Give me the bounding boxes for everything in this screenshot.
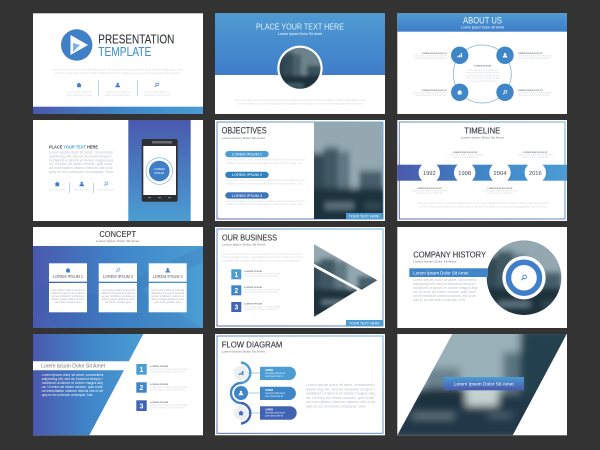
body text: adipiscing elit, sed do eiusmod tempor i bbox=[413, 282, 476, 286]
banner bbox=[443, 377, 524, 390]
slide: photo banner bbox=[397, 334, 567, 436]
icon: smartphone: LOREM bbox=[154, 167, 165, 171]
body text bbox=[49, 150, 114, 174]
item 3 bbox=[225, 192, 305, 206]
title bbox=[98, 32, 174, 59]
card 3: LOREM IPSUM 3 bbox=[153, 274, 183, 279]
label 2: Lorem ipsum dolor sit bbox=[265, 395, 283, 398]
side labels: Lorem ipsum dolor sit amet elit sed bbox=[413, 54, 447, 58]
label 3: LOREM bbox=[265, 410, 273, 412]
centre text: Lorem ipsum dolor sit amet elit sed bbox=[466, 71, 500, 75]
year markers: 2004 bbox=[494, 171, 507, 177]
centre text: Lorem ipsum dolor sit amet bbox=[468, 79, 497, 83]
body text: ua. Ut enim ad minim veniam, quis nostr bbox=[49, 162, 113, 166]
side labels: Lorem ipsum dolor sit amet elit sed bbox=[415, 93, 447, 97]
step 3: Lorem ipsum dolor sit amet elit bbox=[150, 406, 185, 410]
subtitle: Lorem Ipsum Dolor Sit Amet bbox=[222, 243, 265, 247]
circle photo bbox=[486, 240, 562, 315]
label 1: Lorem ipsum dolor sit bbox=[265, 375, 283, 378]
card 1: Lorem ipsum dolor sit amet elit bbox=[52, 288, 85, 292]
body text: ncididunt ut labore et dolore magna aliq bbox=[49, 158, 113, 162]
label 3: Lorem ipsum dolor sit bbox=[265, 414, 283, 417]
icon: smartphone: IPSUM bbox=[155, 171, 165, 175]
highlight bar bbox=[409, 268, 488, 277]
card 1: dolore magna aliqua ut enim bbox=[52, 297, 84, 301]
body text: Lorem ipsum dolor sit amet, consectetur bbox=[413, 278, 478, 282]
body text: ncididunt ut labore et dolore magna aliq bbox=[42, 381, 103, 385]
centre text bbox=[466, 66, 500, 83]
intro text bbox=[52, 68, 183, 75]
step 3: Lorem ipsum dolor sit amet elit sed bbox=[150, 403, 189, 407]
upper captions bbox=[448, 152, 553, 159]
card 2: ad minim veniam quis bbox=[105, 300, 132, 304]
body text: ncididunt ut labore et dolore magna aliq bbox=[413, 286, 477, 290]
slide: company history bbox=[397, 221, 568, 328]
lower captions: Lorem ipsum dolor sit bbox=[416, 191, 443, 195]
icon: smartphone bbox=[142, 139, 178, 202]
body text: ua. Ut enim ad minim veniam, quis nostr bbox=[413, 290, 477, 294]
step 1 bbox=[231, 269, 280, 279]
item 2: Lorem ipsum dolor sit amet, consectetur adipiscing elit, sed do eiusmod tempor bbox=[226, 178, 305, 182]
white heading bar: Lorem Ipsum Dolor Sit Amet bbox=[41, 364, 106, 370]
item 2: LOREM IPSUM 2 bbox=[232, 173, 262, 177]
title: FLOW DIAGRAM bbox=[222, 340, 283, 349]
body text: exercitation ullamco laboris nisi ut aliquip ex ea commodo consequat duis bbox=[222, 258, 300, 262]
body text: Lorem ipsum dolor sit amet, consectetur adipiscing elit, sed do eiusmod tempor incididunt ut labore et dolore magna aliqua ut enim bbox=[417, 201, 549, 205]
card 2: adipiscing elit sed do eiusmod bbox=[102, 291, 135, 295]
step 3: 3 bbox=[234, 305, 238, 312]
lower captions: Lorem ipsum dolor sit amet elit sed bbox=[412, 188, 447, 192]
slide: presentation template cover bbox=[33, 13, 203, 114]
slide: phone bbox=[33, 120, 203, 221]
body text: ad minim veniam, quis nostrud exercitation ullamco laboris nisi ut aliquip ex ea commodo consequat duis aute irure dolor bbox=[237, 102, 363, 106]
title: OBJECTIVES bbox=[222, 126, 267, 136]
label 2: Lorem ipsum dolor sit amet bbox=[265, 392, 285, 395]
step 1: 1 bbox=[140, 367, 144, 374]
white heading bar bbox=[33, 361, 130, 370]
photo label: YOUR TEXT HERE bbox=[349, 215, 380, 219]
icon row: Lorem ipsum dolor sit amet bbox=[66, 93, 92, 97]
item 1 bbox=[225, 151, 305, 165]
step 2 bbox=[136, 382, 189, 393]
side labels: LOREM IPSUM DOLOR SIT bbox=[518, 90, 543, 92]
lower captions: Lorem ipsum dolor sit amet elit sed bbox=[482, 188, 518, 192]
side labels: Lorem ipsum dolor sit amet elit sed bbox=[518, 54, 552, 58]
step 3: Lorem ipsum dolor sit amet elit sed bbox=[244, 304, 280, 308]
upper captions: Lorem ipsum dolor sit amet elit sed bbox=[448, 152, 483, 156]
subtitle: Lorem Ipsum Dolor Sit Amet bbox=[461, 136, 504, 140]
step 1: Lorem ipsum dolor sit amet elit bbox=[150, 370, 185, 374]
item 1: LOREM IPSUM 1 bbox=[232, 152, 262, 156]
frame bbox=[399, 122, 565, 219]
body text bbox=[42, 373, 105, 397]
icon: play logo bbox=[61, 29, 92, 61]
blue header bbox=[215, 13, 385, 75]
step 3: LOREM IPSUM bbox=[150, 402, 168, 404]
body text: adipiscing elit, sed do eiusmod tempor i bbox=[306, 387, 375, 391]
step 2: LOREM IPSUM bbox=[150, 384, 168, 386]
slide: about us bbox=[397, 13, 567, 114]
body text: Lorem ipsum dolor sit amet, consectetur adipiscing elit, sed do eiusmod tempor incididunt ut labore et dolore magna aliqua ut enim bbox=[234, 98, 366, 102]
intro text: ad minim veniam, quis nostrud exercitation ullamco laboris nisi ut aliquip ex ea commodo consequat duis aute irure dolor bbox=[55, 71, 180, 75]
step 2: 2 bbox=[140, 385, 144, 392]
step 1: 1 bbox=[234, 272, 238, 279]
card 2: LOREM IPSUM 2 bbox=[103, 274, 134, 279]
step 1: Lorem ipsum dolor sit amet elit bbox=[244, 274, 277, 278]
body text: ua. Ut enim ad minim veniam, quis nostr bbox=[42, 385, 104, 389]
step 2: 2 bbox=[234, 288, 238, 295]
icon row: Lorem ipsum dolor sit bbox=[67, 90, 91, 94]
step 1: LOREM IPSUM bbox=[244, 271, 262, 273]
triangle photo bbox=[314, 244, 378, 317]
slide: our business bbox=[215, 227, 388, 328]
card 3: tempor incididunt ut labore et bbox=[151, 294, 184, 298]
step 3 bbox=[136, 400, 189, 411]
heading: PLACE YOUR TEXT HERE bbox=[49, 145, 98, 150]
side labels: LOREM IPSUM DOLOR SIT bbox=[518, 53, 543, 55]
card 3: Lorem ipsum dolor sit amet elit bbox=[151, 288, 184, 292]
slide: diagonal blue bbox=[33, 334, 203, 435]
photo label bbox=[346, 320, 383, 326]
body text: ud exercitation ullamco laboris nisi ut ali bbox=[413, 294, 476, 298]
bottom gradient bar bbox=[33, 107, 203, 114]
label 3: Lorem ipsum dolor sit amet bbox=[265, 412, 285, 415]
title: CONCEPT bbox=[99, 230, 136, 239]
blue panel bbox=[128, 120, 191, 221]
side labels: Lorem ipsum dolor sit amet elit sed bbox=[413, 90, 447, 94]
item 2: incididunt ut labore et dolore magna aliqua ut enim ad minim veniam, quis bbox=[226, 182, 302, 186]
subtitle: Lorem Ipsum Dolor Sit Amet bbox=[96, 239, 139, 243]
body text: ua. Ut enim ad minim veniam, quis nostr bbox=[306, 396, 376, 400]
year markers bbox=[419, 162, 546, 183]
body text: quip ex ea commodo consequat. Duis bbox=[42, 393, 93, 397]
step 3: LOREM IPSUM bbox=[244, 304, 262, 306]
label 3 bbox=[260, 406, 297, 420]
icon row: Lorem ipsum dolor bbox=[74, 188, 90, 192]
item 1: incididunt ut labore et dolore magna aliqua ut enim ad minim veniam, quis bbox=[226, 161, 302, 165]
body text: ud exercitation ullamco laboris nisi ut ali bbox=[42, 389, 103, 393]
body text: ad minim veniam, quis nostrud exercitation ullamco laboris nisi ut aliquip ex ea commodo consequat duis aute irure dolor bbox=[419, 204, 547, 208]
side labels: LOREM IPSUM DOLOR SIT bbox=[422, 53, 447, 55]
icon row: Lorem ipsum dolor sit amet bbox=[144, 93, 170, 97]
year markers: 1992 bbox=[423, 171, 436, 177]
title: PLACE YOUR TEXT HERE bbox=[256, 21, 344, 31]
body text: Lorem ipsum dolor sit amet, consectetur bbox=[42, 373, 105, 377]
step 3: Lorem ipsum dolor sit amet elit bbox=[244, 307, 277, 311]
body text: ud exercitation ullamco laboris nisi ut ali bbox=[306, 400, 375, 404]
slide: timeline bbox=[397, 120, 567, 221]
gradient panel bbox=[33, 246, 203, 328]
icon row: Lorem ipsum dolor sit amet bbox=[105, 93, 131, 97]
year markers: 1998 bbox=[458, 171, 471, 177]
title: OUR BUSINESS bbox=[222, 232, 277, 242]
body text: incididunt ut labore et dolore magna aliqua ut enim ad minim veniam, quis nostrud bbox=[222, 255, 303, 259]
card 2 bbox=[99, 263, 137, 312]
lower captions: LOREM IPSUM DOLOR SIT bbox=[417, 188, 442, 190]
card 3: adipiscing elit sed do eiusmod bbox=[151, 291, 185, 295]
ring diagram bbox=[451, 45, 514, 103]
step 3 bbox=[231, 302, 280, 312]
subtitle: Lorem Ipsum Dolor Sit Amet bbox=[222, 349, 265, 353]
side labels: Lorem ipsum dolor sit amet elit sed bbox=[518, 93, 550, 97]
label 1: Lorem ipsum dolor sit amet bbox=[265, 372, 285, 375]
icon row bbox=[66, 80, 170, 97]
band bbox=[397, 165, 567, 181]
title: COMPANY HISTORY bbox=[413, 251, 487, 260]
lower captions: Lorem ipsum dolor sit bbox=[487, 191, 513, 195]
body text: quip ex ea commodo consequat. Duis bbox=[49, 170, 113, 174]
card 1: adipiscing elit sed do eiusmod bbox=[52, 291, 85, 295]
target badge bbox=[502, 256, 546, 299]
step 2: LOREM IPSUM bbox=[244, 287, 262, 289]
blue header bbox=[397, 13, 567, 32]
card 2: tempor incididunt ut labore et bbox=[102, 294, 135, 298]
step 2 bbox=[231, 285, 280, 295]
slide: concept bbox=[33, 227, 203, 328]
card 3: ad minim veniam quis bbox=[155, 300, 181, 304]
step 1: Lorem ipsum dolor sit amet elit sed bbox=[150, 367, 189, 371]
slide: objectives bbox=[215, 120, 385, 221]
subtitle: Lorem Ipsum Dolor Sit Amet bbox=[461, 26, 504, 30]
item 2 bbox=[225, 172, 305, 186]
photo label: YOUR TEXT HERE bbox=[349, 322, 380, 326]
item 3: Lorem ipsum dolor sit amet, consectetur adipiscing elit, sed do eiusmod tempor bbox=[226, 199, 305, 203]
subtitle: Lorem Ipsum Dolor Sit Amet bbox=[222, 136, 265, 140]
diagonal gradient panel bbox=[33, 334, 143, 435]
step 2: Lorem ipsum dolor sit amet elit bbox=[150, 388, 185, 392]
step 3: 3 bbox=[140, 403, 144, 410]
body text bbox=[417, 201, 549, 208]
body text bbox=[234, 98, 366, 106]
circle photo bbox=[277, 46, 323, 89]
step 1 bbox=[136, 364, 189, 375]
icon row: Lorem ipsum dolor bbox=[98, 188, 114, 192]
title: TIMELINE bbox=[464, 126, 500, 135]
item 3: LOREM IPSUM 3 bbox=[232, 194, 262, 198]
frame bbox=[217, 122, 383, 219]
body text bbox=[306, 383, 376, 408]
centre text: Lorem ipsum dolor sit amet elit bbox=[468, 68, 498, 72]
side labels bbox=[413, 53, 552, 97]
step 2: Lorem ipsum dolor sit amet elit sed bbox=[150, 385, 189, 389]
step 2: Lorem ipsum dolor sit amet elit sed bbox=[244, 288, 280, 292]
upper captions: Lorem ipsum dolor sit bbox=[522, 155, 548, 159]
side labels: LOREM IPSUM DOLOR SIT bbox=[422, 90, 447, 92]
card 1: tempor incididunt ut labore et bbox=[52, 294, 85, 298]
photo bbox=[314, 122, 383, 219]
frame bbox=[217, 336, 383, 433]
centre text: Lorem ipsum dolor sit amet elit sed bbox=[466, 73, 500, 77]
facets bbox=[33, 246, 203, 328]
body text: adipiscing elit, sed do eiusmod tempor i bbox=[42, 377, 103, 381]
title: PRESENTATION bbox=[98, 32, 174, 46]
label 1: LOREM bbox=[265, 370, 273, 372]
subtitle: Lorem Ipsum Dolor Sit Amet bbox=[278, 32, 322, 36]
frame bbox=[217, 229, 383, 326]
icon row: Lorem ipsum dolor sit bbox=[106, 90, 130, 94]
card 2: dolore magna aliqua ut enim bbox=[102, 297, 134, 301]
lower captions: LOREM IPSUM DOLOR SIT bbox=[488, 188, 513, 190]
highlight bar: Lorem Ipsum Dolor Sit Amet bbox=[413, 271, 469, 276]
label 2 bbox=[260, 387, 296, 400]
label 2: LOREM bbox=[265, 390, 273, 392]
parallelogram photo bbox=[398, 334, 567, 436]
photo label bbox=[346, 213, 383, 219]
lower captions bbox=[412, 188, 518, 195]
icon row: Lorem ipsum dolor sit bbox=[145, 90, 169, 94]
item 3: incididunt ut labore et dolore magna aliqua ut enim ad minim veniam, quis bbox=[226, 202, 302, 206]
upper captions: LOREM IPSUM DOLOR SIT bbox=[452, 152, 478, 154]
slide: place your text here bbox=[215, 13, 385, 114]
centre text: Lorem ipsum dolor sit amet elit sed bbox=[466, 76, 500, 80]
card 1: LOREM IPSUM 1 bbox=[53, 274, 84, 279]
body text bbox=[413, 278, 478, 302]
card 1 bbox=[49, 263, 87, 312]
body text: Lorem ipsum dolor sit amet, consectetur bbox=[49, 150, 114, 154]
body text: adipiscing elit, sed do eiusmod tempor i bbox=[49, 154, 112, 158]
body text: Lorem ipsum dolor sit amet, consectetur adipiscing elit, sed do eiusmod tempor bbox=[222, 252, 303, 256]
upper captions: LOREM IPSUM DOLOR SIT bbox=[522, 152, 548, 154]
step 1: Lorem ipsum dolor sit amet elit sed bbox=[244, 272, 280, 276]
body text: quip ex ea commodo consequat. Duis bbox=[413, 298, 465, 302]
body text: quip ex ea commodo consequat. Duis bbox=[306, 404, 366, 408]
label 1 bbox=[260, 367, 296, 380]
body text: ncididunt ut labore et dolore magna aliq bbox=[306, 392, 375, 396]
side labels: Lorem ipsum dolor sit amet elit sed bbox=[518, 56, 550, 60]
card 3 bbox=[149, 263, 187, 312]
side labels: Lorem ipsum dolor sit amet elit sed bbox=[415, 56, 447, 60]
upper captions: Lorem ipsum dolor sit amet elit sed bbox=[518, 152, 553, 156]
step 1: LOREM IPSUM bbox=[150, 366, 168, 368]
card 2: Lorem ipsum dolor sit amet elit bbox=[102, 288, 135, 292]
side labels: Lorem ipsum dolor sit amet elit sed bbox=[518, 90, 552, 94]
body text: Lorem ipsum dolor sit amet, consectetur bbox=[306, 383, 376, 387]
banner: Lorem Ipsum Dolor Sit Amet bbox=[454, 381, 514, 386]
title: TEMPLATE bbox=[98, 45, 151, 59]
centre text: LOREM IPSUM bbox=[474, 66, 491, 68]
card 1: ad minim veniam quis bbox=[55, 300, 82, 304]
card 3: dolore magna aliqua ut enim bbox=[151, 297, 184, 301]
item 1: Lorem ipsum dolor sit amet, consectetur adipiscing elit, sed do eiusmod tempor bbox=[226, 158, 305, 162]
serpentine nodes bbox=[231, 362, 262, 424]
title: ABOUT US bbox=[463, 16, 502, 26]
body text bbox=[222, 252, 303, 262]
upper captions: Lorem ipsum dolor sit bbox=[452, 155, 478, 159]
icon row: Lorem ipsum dolor bbox=[49, 188, 65, 192]
intro text: Lorem ipsum dolor sit amet, consectetur adipiscing elit, sed do eiusmod tempor incididunt ut labore et dolore magna aliqua ut enim bbox=[52, 68, 183, 72]
slide: flow diagram bbox=[215, 334, 385, 435]
step 2: Lorem ipsum dolor sit amet elit bbox=[244, 290, 277, 294]
year markers: 2016 bbox=[529, 171, 542, 177]
icon row bbox=[49, 182, 114, 193]
subtitle: Lorem Ipsum Dolor Sit Amet bbox=[413, 260, 456, 264]
body text: ud exercitation ullamco laboris nisi ut ali bbox=[49, 166, 113, 170]
